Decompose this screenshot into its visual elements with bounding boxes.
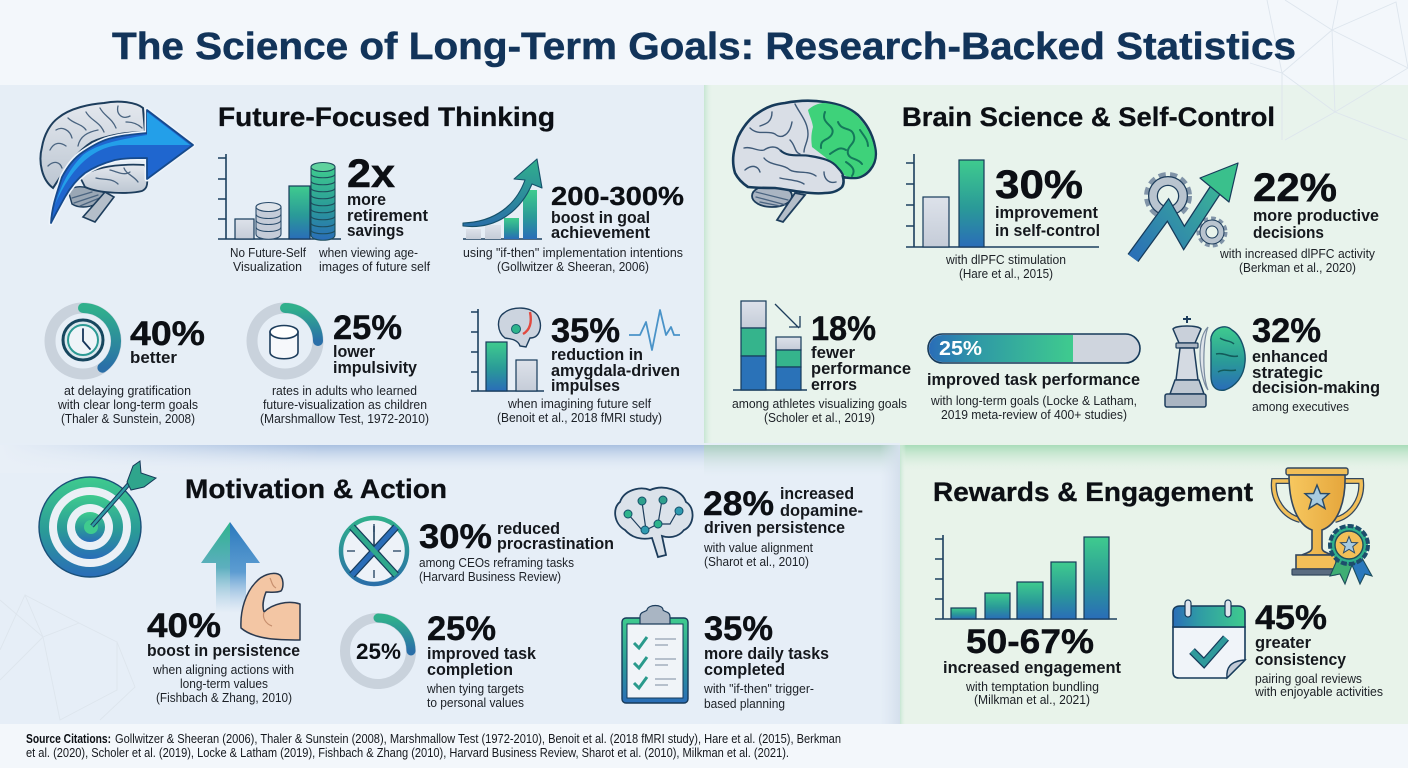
stat: 35% amygdala: reduction in xyxy=(551,346,643,364)
caption: CEOs: among CEOs reframing tasks xyxy=(419,555,574,570)
stat: 30% procrastination: 30% xyxy=(419,518,492,556)
stat: 32% strategic decision-making: strategic xyxy=(1252,364,1323,382)
chart: engagement bars xyxy=(935,535,1117,619)
stat: 18% errors: performance xyxy=(811,360,911,378)
caption: bar labels: Visualization xyxy=(233,259,302,274)
stat: 200-300%: 200-300% xyxy=(551,181,684,211)
stat: 25% task completion: 25% xyxy=(427,610,496,648)
caption: athletes: (Scholer et al., 2019) xyxy=(764,410,875,425)
panel: brain science and self-control xyxy=(704,0,1408,443)
caption: fMRI study: (Benoit et al., 2018 fMRI study) xyxy=(497,410,662,425)
caption: aligning actions xyxy=(152,662,294,705)
icon: crossed-out clock xyxy=(341,518,407,584)
stat: 2x retirement savings: retirement xyxy=(347,207,428,225)
stat: 30% procrastination: procrastination xyxy=(497,535,614,553)
stat: 50-67% engagement: 50-67% xyxy=(966,623,1094,661)
stat: 25% task completion: improved task xyxy=(427,645,537,663)
stat: 30% self-control: improvement xyxy=(995,204,1099,222)
caption: dlPFC activity: (Berkman et al., 2020) xyxy=(1239,260,1356,275)
stat: 40% better xyxy=(130,315,205,367)
caption: personal values xyxy=(426,681,524,710)
source citations: et al. (2020), Scholer et al. (2019), Locke & Latham (2019), Fishbach & Zhang (2010), Harvard Business Review, Sharot et al. (2010), Milkman et al. (2021). xyxy=(26,746,789,760)
progress bar: 25% xyxy=(928,334,1140,363)
caption: marshmallow test: rates in adults who learned xyxy=(272,383,417,398)
stat: 35% daily tasks: more daily tasks xyxy=(704,645,829,663)
stat: 2x retirement savings: more xyxy=(347,191,386,209)
caption: value alignment: with value alignment xyxy=(703,540,813,555)
stat: 25% lower impulsivity: impulsivity xyxy=(333,359,418,377)
caption: trigger-based planning: based planning xyxy=(704,696,785,711)
caption: bar labels: images of future self xyxy=(319,259,430,274)
stat: 28% dopamine persistence: dopamine- xyxy=(780,502,863,520)
stat: 30% procrastination xyxy=(419,518,614,556)
stat: 35% daily tasks: completed xyxy=(704,661,785,679)
source citations xyxy=(26,732,841,760)
stat: 200-300%: boost in goal xyxy=(551,209,650,227)
stat: 40% better: better xyxy=(130,349,178,367)
caption: CEOs xyxy=(419,555,574,584)
chart: stacked error bars with arrow xyxy=(733,301,807,390)
stat: 30% procrastination: reduced xyxy=(497,520,560,538)
caption: delaying gratification: at delaying gratification xyxy=(64,383,191,398)
caption: bar labels: No Future-Self xyxy=(230,245,306,260)
stat: 30% self-control xyxy=(995,163,1100,240)
stat: 28% dopamine persistence: 28% xyxy=(703,485,774,523)
stat: 45% consistency xyxy=(1255,599,1347,669)
panel: motivation and action xyxy=(0,443,900,724)
caption: temptation bundling: with temptation bundling xyxy=(965,679,1099,694)
stat: 30% self-control: in self-control xyxy=(995,222,1100,240)
caption: CEOs: (Harvard Business Review) xyxy=(419,569,561,584)
heading: future-focused thinking: Future-Focused Thinking xyxy=(218,102,555,132)
caption: marshmallow test xyxy=(260,383,429,426)
icon: clipboard checklist xyxy=(622,606,688,703)
stat: 45% consistency: consistency xyxy=(1255,651,1347,669)
stat: 2x retirement savings xyxy=(347,152,428,240)
icon: brain with green prefrontal region xyxy=(733,101,876,222)
stat: 2x retirement savings: 2x xyxy=(347,152,395,196)
caption: value alignment: (Sharot et al., 2010) xyxy=(704,554,809,569)
source citations: Source Citations: xyxy=(26,732,111,746)
caption: dlPFC activity: with increased dlPFC activity xyxy=(1219,246,1375,261)
caption: delaying gratification xyxy=(57,383,198,426)
caption: personal values: to personal values xyxy=(427,695,524,710)
stat: 18% errors: 18% xyxy=(811,310,876,348)
caption: trigger-based planning xyxy=(703,681,814,711)
caption: dlPFC activity xyxy=(1219,246,1375,275)
stat: 50-67% engagement: increased engagement xyxy=(943,659,1121,677)
caption: trigger-based planning: with "if-then" trigger- xyxy=(703,681,814,696)
stat: 25% lower impulsivity xyxy=(333,309,418,377)
stat: 45% consistency: 45% xyxy=(1255,599,1327,637)
chart: amygdala bars with brain xyxy=(471,308,544,391)
stat: 200-300% xyxy=(551,181,684,242)
stat: 35% amygdala xyxy=(551,312,680,395)
caption: bar labels: when viewing age- xyxy=(318,245,418,260)
caption: meta-review: 2019 meta-review of 400+ studies) xyxy=(941,407,1127,422)
caption: bar labels xyxy=(230,245,430,274)
caption: delaying gratification: (Thaler & Sunstein, 2008) xyxy=(61,411,195,426)
caption: if-then intentions xyxy=(463,245,683,274)
icon: 25% ring: 25% xyxy=(356,639,401,664)
stat: 40% persistence: 40% xyxy=(147,607,221,645)
stat: 25% task completion: completion xyxy=(427,661,513,679)
stat: 22% decisions: more productive xyxy=(1253,207,1379,225)
stat: 35% amygdala: amygdala-driven xyxy=(551,362,680,380)
caption: marshmallow test: future-visualization as children xyxy=(263,397,427,412)
stat: 25% task completion xyxy=(427,610,537,679)
icon: brain with forward arrow xyxy=(40,102,193,223)
stat: 28% dopamine persistence: increased xyxy=(780,485,854,503)
stat: 200-300%: achievement xyxy=(551,224,650,242)
caption: dlPFC stimulation xyxy=(945,252,1066,281)
stat: 28% dopamine persistence xyxy=(703,485,863,537)
source citations: Gollwitzer & Sheeran (2006), Thaler & Sunstein (2008), Marshmallow Test (1972-2010), Benoit et al. (2018 fMRI study), Hare et al. (2015), Berkman xyxy=(115,732,841,746)
stat: 22% decisions: decisions xyxy=(1253,224,1324,242)
icon: trophy and ribbon xyxy=(1274,468,1372,584)
caption: value alignment xyxy=(703,540,813,569)
caption: aligning actions: when aligning actions with xyxy=(152,662,294,677)
stat: 32% strategic decision-making xyxy=(1252,312,1380,414)
caption: delaying gratification: with clear long-term goals xyxy=(57,397,198,412)
stat: 35% amygdala: impulses xyxy=(551,377,620,395)
stat: 22% decisions: 22% xyxy=(1253,166,1337,210)
stat: 18% errors: fewer xyxy=(811,344,856,362)
stat: 22% decisions xyxy=(1253,166,1379,242)
icon: 25% ring xyxy=(345,618,411,684)
title: The Science of Long-Term Goals: Research-Backed Statistics xyxy=(112,26,1296,68)
caption: athletes xyxy=(732,396,907,425)
caption: enjoyable activities: with enjoyable activities xyxy=(1254,684,1383,699)
caption: meta-review: with long-term goals (Locke & Latham, xyxy=(930,393,1137,408)
stat: 35% amygdala: 35% xyxy=(551,312,620,350)
caption: enjoyable activities: pairing goal reviews xyxy=(1255,671,1362,686)
caption: fMRI study: when imagining future self xyxy=(507,396,651,411)
stat: 32% strategic decision-making: decision-making xyxy=(1252,379,1380,397)
stat: 45% consistency: greater xyxy=(1255,634,1312,652)
chart: rising arrow and bars xyxy=(463,159,542,239)
heading: motivation and action: Motivation & Action xyxy=(185,474,447,504)
icon: target with arrow xyxy=(39,461,156,577)
stat: 40% better: 40% xyxy=(130,315,205,353)
caption: athletes: among athletes visualizing goals xyxy=(732,396,907,411)
stat: 28% dopamine persistence: driven persistence xyxy=(704,519,845,537)
caption: meta-review xyxy=(930,393,1137,422)
panel: rewards and engagement xyxy=(900,443,1408,724)
stat: 25% lower impulsivity: lower xyxy=(333,343,376,361)
caption: if-then intentions: (Gollwitzer & Sheeran, 2006) xyxy=(497,259,649,274)
caption: personal values: when tying targets xyxy=(426,681,524,696)
icon: brain network xyxy=(615,488,693,557)
stat: 18% errors xyxy=(811,310,911,394)
stat: 2x retirement savings: savings xyxy=(347,222,404,240)
caption: fMRI study xyxy=(497,396,662,425)
stat: 35% daily tasks: 35% xyxy=(704,610,773,648)
stat: 32% strategic decision-making: enhanced xyxy=(1252,348,1328,366)
heading: brain science: Brain Science & Self-Control xyxy=(902,102,1275,132)
chart: self-control bars xyxy=(906,154,1099,247)
stat: 18% errors: errors xyxy=(811,376,857,394)
icon: chess king and brain xyxy=(1165,316,1245,407)
stat: 35% daily tasks xyxy=(704,610,829,679)
caption: temptation bundling xyxy=(965,679,1099,707)
stat: 40% persistence xyxy=(147,607,300,660)
icon: pulse line xyxy=(629,310,680,350)
icon: gears and zigzag arrow xyxy=(1133,163,1238,258)
stat: improved task performance: improved task performance xyxy=(927,371,1140,389)
panel: future-focused thinking xyxy=(0,85,704,443)
stat: 50-67% engagement xyxy=(943,623,1121,677)
caption: aligning actions: (Fishbach & Zhang, 2010) xyxy=(156,690,292,705)
stat: 32% strategic decision-making: 32% xyxy=(1252,312,1321,350)
stat: 40% persistence: boost in persistence xyxy=(147,642,300,660)
caption: dlPFC stimulation: with dlPFC stimulation xyxy=(945,252,1066,267)
icon: 40% ring with clock xyxy=(50,308,116,374)
caption: temptation bundling: (Milkman et al., 2021) xyxy=(974,692,1090,707)
caption: aligning actions: long-term values xyxy=(180,676,268,691)
icon: 25% ring with marshmallow xyxy=(252,308,318,374)
stat: 30% self-control: 30% xyxy=(995,163,1083,207)
stat: 25% lower impulsivity: 25% xyxy=(333,309,402,347)
heading: rewards and engagement: Rewards & Engagement xyxy=(933,477,1253,507)
progress bar: 25%: 25% xyxy=(939,338,982,360)
chart: retirement savings bars xyxy=(218,154,341,240)
caption: dlPFC stimulation: (Hare et al., 2015) xyxy=(959,266,1053,281)
caption: marshmallow test: (Marshmallow Test, 1972-2010) xyxy=(260,411,429,426)
caption: if-then intentions: using "if-then" implementation intentions xyxy=(463,245,683,260)
icon: calendar with check xyxy=(1173,600,1245,678)
caption: enjoyable activities xyxy=(1254,671,1383,699)
stat: 32% strategic decision-making: among executives xyxy=(1252,399,1349,414)
icon: up arrow with flexed arm xyxy=(201,522,300,640)
